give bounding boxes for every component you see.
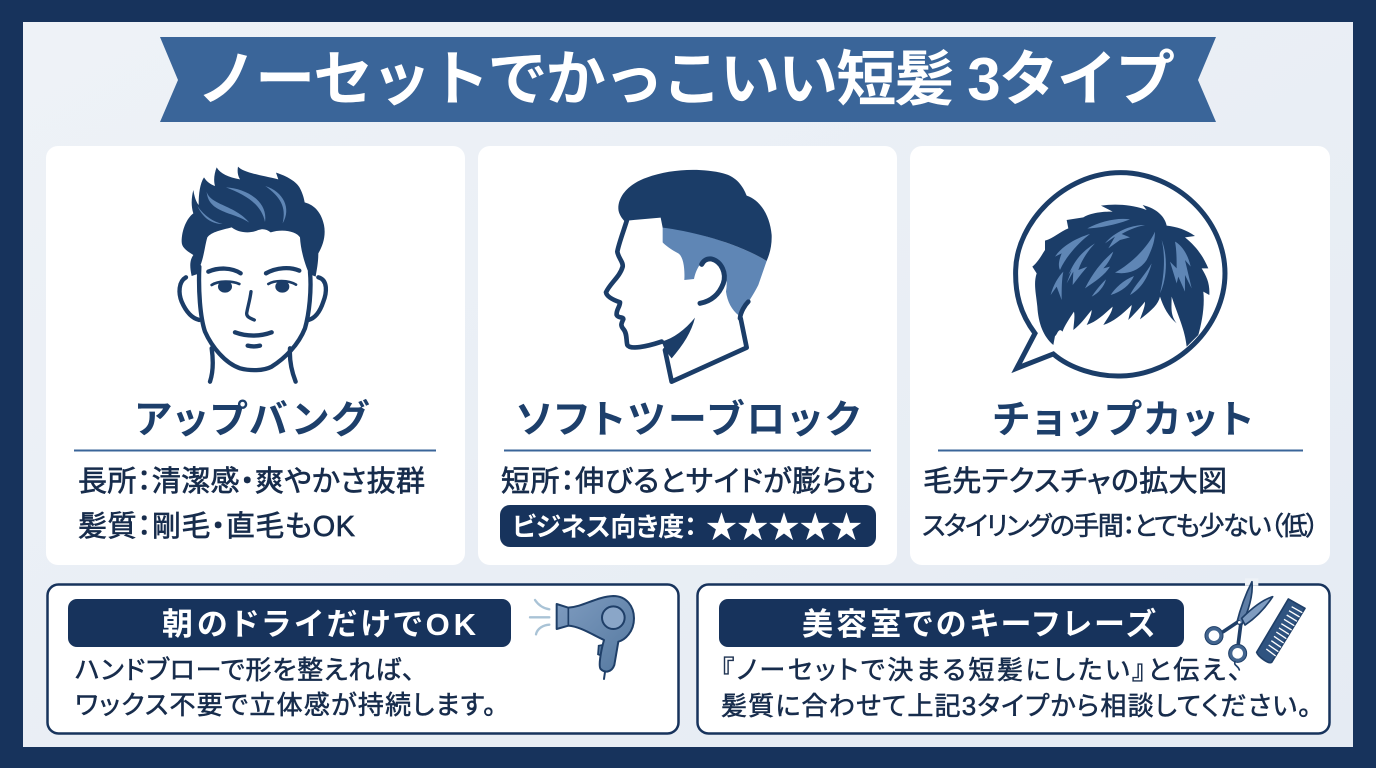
text: 短所: 短所：伸びるとサイドが膨らむ: [501, 465, 875, 498]
heading: チョップカット: チョップカット: [993, 399, 1253, 442]
heading bar: [719, 599, 1184, 647]
icon: side profile with two-block: [606, 170, 772, 382]
badge: ビジネス向き度: ビジネス向き度：: [512, 512, 697, 542]
heading bar: [68, 599, 511, 647]
icon: scissors and comb: [1205, 578, 1305, 670]
text: 長所: 長所：清潔感・爽やかさ抜群: [78, 465, 425, 498]
heading bar: 美容室でのキーフレーズ: [802, 607, 1156, 642]
panel: 美容室でのキーフレーズ: [698, 578, 1330, 734]
heading: アップバング: アップバング: [135, 399, 370, 442]
panel: チョップカット: [910, 146, 1330, 565]
panel: アップバング: [46, 146, 465, 565]
icon: front face with up-bang hair: [180, 167, 326, 382]
icon: hair texture speech bubble: [1016, 173, 1225, 376]
text: ハンドブロー: ハンドブローで形を整えれば、: [75, 655, 415, 685]
text: キーフレーズ説明: 『ノーセットで決まる短髪にしたい』と伝え、: [721, 655, 1241, 685]
panel: ソフトツーブロック: [478, 146, 897, 565]
heading bar: 朝のドライだけでOK: [162, 607, 477, 642]
icon: hair dryer: [530, 596, 634, 679]
panel: 朝のドライだけでOK: ワックス不要で立体感が持続します。: [75, 690, 496, 720]
text: スタイリングの手間: スタイリングの手間：とても少ない（低）: [922, 511, 1319, 541]
badge: ビジネス向き度: ★★★★★: [706, 510, 862, 545]
heading: ソフトツーブロック: ソフトツーブロック: [516, 398, 860, 442]
panel: 朝のドライだけでOK: [48, 584, 678, 734]
text: 髪質: 髪質：剛毛・直毛もOK: [78, 510, 356, 543]
panel: 美容室でのキーフレーズ: 髪質に合わせて上記3タイプから相談してください。: [721, 691, 1311, 721]
title banner: ノーセットでかっこいい短髪 3タイプ: [197, 46, 1175, 113]
text: 毛先テクスチャの拡大図: 毛先テクスチャの拡大図: [923, 465, 1227, 498]
badge: ビジネス向き度: [500, 505, 876, 547]
